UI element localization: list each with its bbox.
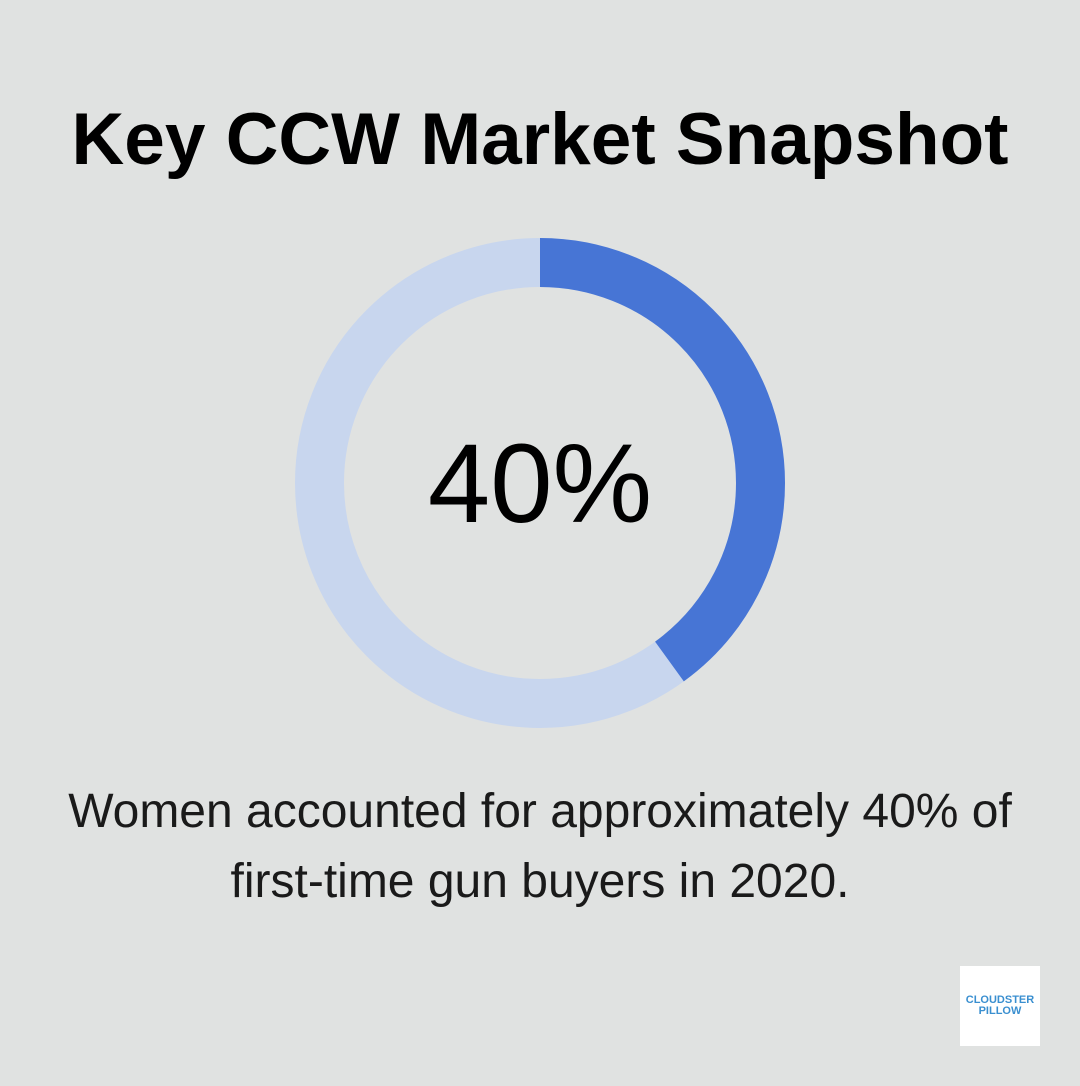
logo: CLOUDSTER xyxy=(966,994,1034,1006)
title: Key CCW Market Snapshot xyxy=(72,99,1008,180)
logo: PILLOW xyxy=(979,1005,1021,1017)
value: 40%: 40% xyxy=(428,421,652,546)
caption xyxy=(68,785,1012,908)
logo xyxy=(960,966,1040,1046)
caption: Women accounted for approximately 40% of xyxy=(68,785,1012,838)
caption: first-time gun buyers in 2020. xyxy=(231,855,849,908)
